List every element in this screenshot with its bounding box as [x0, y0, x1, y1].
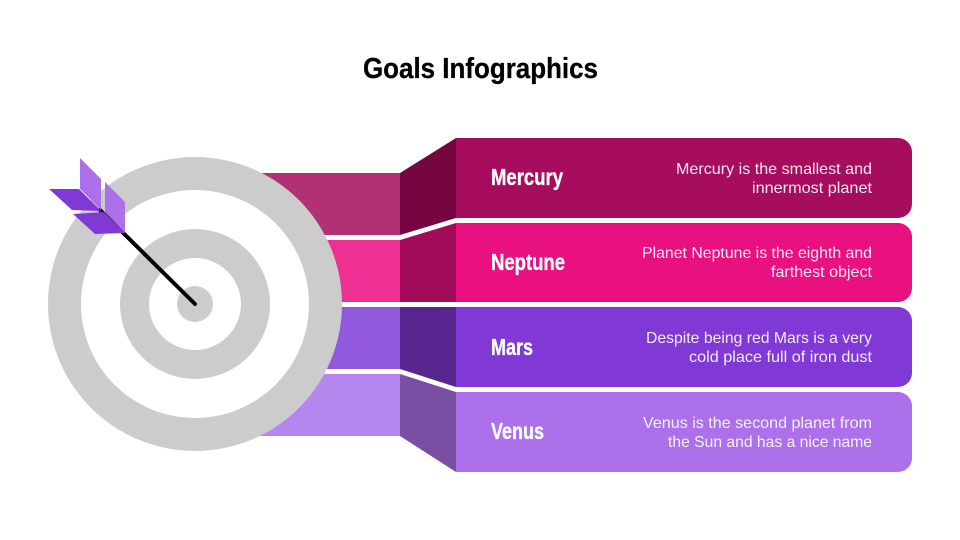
- heading: Mars: Mars: [491, 334, 533, 360]
- text: Mercury description: Mercury is the smallest and: [676, 161, 872, 178]
- back strip: Mars: [240, 307, 400, 369]
- text: Venus description: Venus is the second planet from: [643, 415, 872, 432]
- text: Mercury description: innermost planet: [752, 180, 873, 197]
- card: Neptune: [456, 223, 912, 302]
- back strip: Neptune: [240, 240, 400, 302]
- fold: Neptune: [400, 223, 456, 302]
- text: Mars description: Despite being red Mars is a very: [646, 330, 872, 347]
- back strip: Venus: [240, 374, 400, 436]
- panel: Neptune band: [240, 223, 912, 302]
- text: Mars description: cold place full of iron dust: [689, 349, 873, 366]
- title: Goals Infographics: [363, 53, 598, 85]
- icon: target: [48, 157, 342, 451]
- text: Venus description: the Sun and has a nice name: [668, 434, 872, 451]
- text: Neptune description: farthest object: [771, 264, 873, 281]
- panel: Venus band: [240, 374, 912, 472]
- back strip: Mercury: [240, 173, 400, 235]
- card: Mercury: [456, 138, 912, 218]
- fold: Mercury: [400, 138, 456, 235]
- card: Mars: [456, 307, 912, 387]
- text: Neptune description: Planet Neptune is the eighth and: [642, 245, 872, 262]
- fold: Venus: [400, 374, 456, 472]
- card: Venus: [456, 392, 912, 472]
- heading: Venus: Venus: [491, 418, 544, 444]
- icon: arrow: [49, 158, 195, 304]
- fold: Mars: [400, 307, 456, 387]
- heading: Mercury: Mercury: [491, 164, 563, 190]
- panel: Mars band: [240, 307, 912, 387]
- heading: Neptune: Neptune: [491, 249, 565, 275]
- panel: Mercury band: [240, 138, 912, 235]
